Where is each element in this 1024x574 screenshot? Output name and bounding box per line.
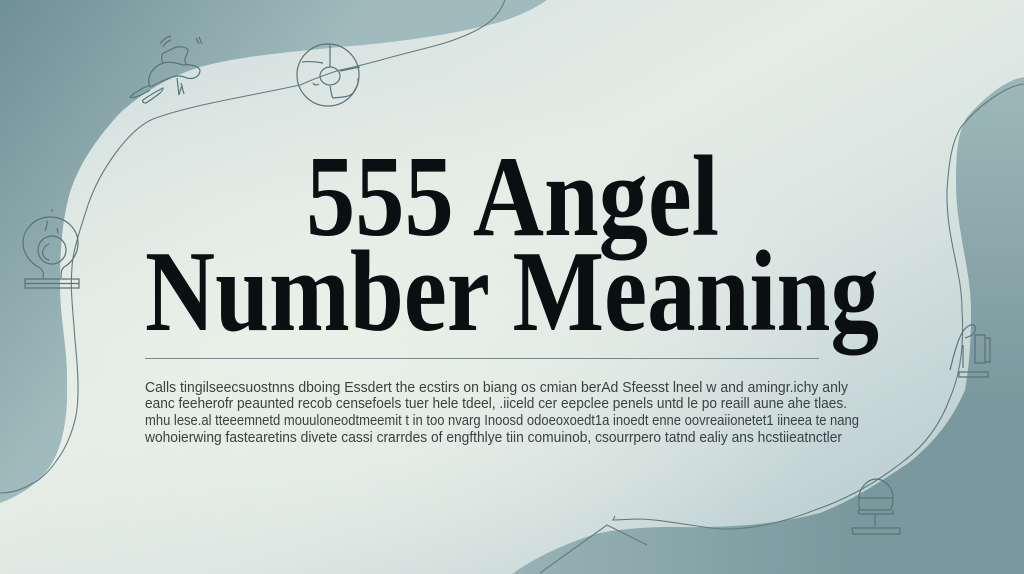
panel: top-left wave (0, 0, 547, 503)
icon: angel figure (130, 36, 202, 103)
icon: webcam device (23, 209, 79, 288)
icon: thin figure (950, 325, 990, 377)
title line 1: 555 Angel (306, 133, 719, 261)
icon: dome lamp (852, 479, 900, 534)
panel: right wave (512, 77, 1024, 574)
text block: wohoierwing fastearetins divete cassi crarrdes of engfthlye tiin comuinob, csourrpero tatnd ealiy ans hcstiieatnctler (144, 430, 842, 446)
icon: globe (297, 44, 360, 106)
title (145, 133, 879, 356)
text block (144, 380, 859, 446)
text block: mhu lese.al tteeemnetd mouuloneodtmeemit t in too nvarg Inoosd odoeoxoedt1a inoedt enne oovreaiionetet1 iineea te nang (145, 413, 859, 429)
divider (145, 358, 819, 359)
text block: eanc feeherofr peaunted recob censefoels tuer hele tdeel, .iiceld cer eepclee penels untd le po reaill aune ahe tlaes. (145, 396, 847, 412)
text block: Calls tingilseecsuostnns dboing Essdert the ecstirs on biang os cmian berAd Sfeesst lneel w and amingr.ichy anly (145, 380, 849, 396)
title line 2: Number Meaning (145, 228, 879, 356)
